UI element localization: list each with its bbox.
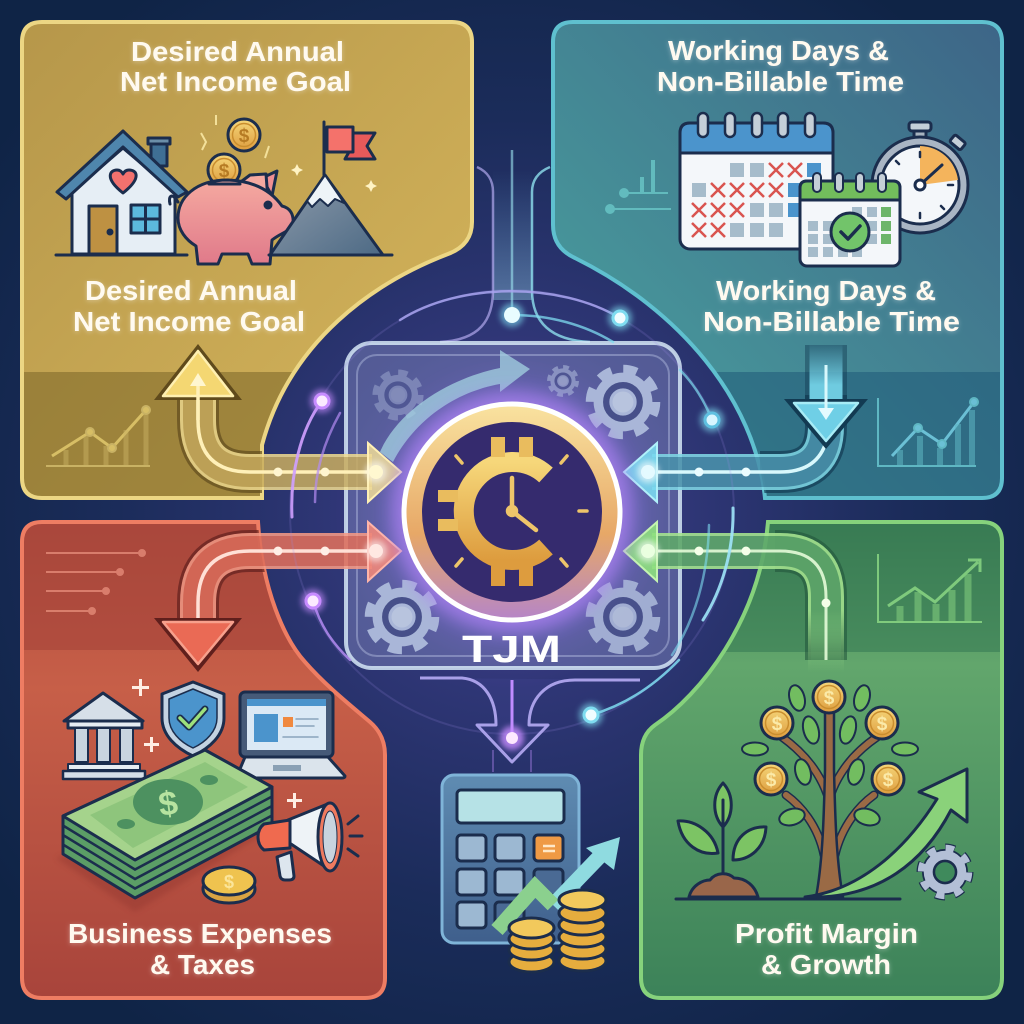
glowing nodes — [301, 303, 724, 727]
heading: repeat — [73, 275, 305, 337]
panel: working days and non-billable time — [553, 22, 1002, 498]
mini chart: red lines — [46, 550, 145, 614]
icon: stopwatch — [872, 122, 968, 233]
icon: stack of money: $ — [156, 784, 180, 824]
heading: top: Non-Billable Time — [657, 66, 904, 97]
arrow: red — [154, 522, 401, 672]
icon: falling coins: $ — [219, 161, 230, 182]
icon: piggy bank — [169, 171, 293, 264]
icon: money tree — [742, 684, 918, 897]
connector arrow: bottom — [420, 678, 640, 772]
icon: tree coins: $ — [824, 688, 835, 709]
icon: big calendar — [680, 113, 833, 249]
clock hands — [456, 456, 587, 566]
arrow: green — [624, 522, 830, 672]
icon: shield — [162, 682, 224, 756]
icon: stack of money — [56, 750, 272, 912]
icon: tree coins: $ — [877, 714, 888, 735]
icon: falling coins — [201, 115, 269, 186]
icon: falling coins: $ — [239, 126, 250, 147]
heading: Profit Margin — [735, 918, 918, 949]
heading: top: Desired Annual — [131, 36, 344, 67]
icon: gear — [921, 848, 969, 896]
icon: tree coins: $ — [766, 770, 777, 791]
panel: business expenses and taxes — [22, 522, 385, 998]
icon: coin stacks — [509, 890, 606, 972]
curved arrow in card — [380, 350, 530, 462]
mini chart: green — [878, 554, 982, 622]
heading: & Growth — [761, 949, 891, 980]
icon: tree coins: $ — [883, 770, 894, 791]
mini chart: yellow — [46, 406, 150, 466]
icon: house — [56, 131, 187, 255]
heading: & Taxes — [150, 949, 255, 980]
heading: top — [120, 36, 351, 97]
icon: calculator — [442, 775, 579, 943]
glow behind center — [382, 382, 642, 642]
mini chart: top teal — [606, 160, 671, 213]
heading: top: Working Days & — [668, 35, 889, 66]
icon: bank — [63, 693, 145, 779]
center clock badge — [392, 392, 632, 632]
icon: tree coins: $ — [772, 714, 783, 735]
icon: tree coins — [755, 681, 904, 795]
heading: top — [657, 35, 904, 97]
glowing orbit arcs — [290, 290, 734, 734]
center card — [346, 343, 680, 668]
icon: laptop — [237, 692, 345, 778]
heading: repeat: Desired Annual — [85, 275, 297, 306]
gear-shaped C — [438, 437, 546, 586]
mini chart: teal — [878, 398, 978, 466]
panel: profit margin and growth — [641, 522, 1002, 998]
heading: repeat: Working Days & — [716, 275, 936, 306]
icon: sprout — [676, 783, 900, 899]
heading: Business Expenses — [68, 918, 332, 949]
arrow: yellow — [154, 344, 401, 502]
heading — [735, 918, 918, 980]
label: TJM: TJM — [462, 629, 561, 671]
heading: repeat — [703, 275, 960, 337]
icon: coin: $ — [224, 872, 234, 892]
icon: sparkles — [132, 679, 302, 808]
connector: top pipes — [440, 150, 590, 342]
heading: repeat: Non-Billable Time — [703, 306, 960, 337]
icon: megaphone — [258, 803, 362, 880]
arrow: teal — [624, 345, 868, 502]
icon: growth arrow over calculator — [497, 837, 620, 930]
panel: desired annual net income goal — [22, 22, 472, 498]
gears — [369, 367, 656, 650]
icon: sparkles — [291, 164, 377, 192]
heading — [68, 918, 332, 980]
heading: top: Net Income Goal — [120, 66, 351, 97]
icon: growth arrow — [805, 769, 967, 897]
icon: small calendar with check — [800, 173, 900, 266]
icon: coin — [203, 867, 255, 903]
icon: mountain with flag — [269, 122, 392, 255]
heading: repeat: Net Income Goal — [73, 306, 305, 337]
